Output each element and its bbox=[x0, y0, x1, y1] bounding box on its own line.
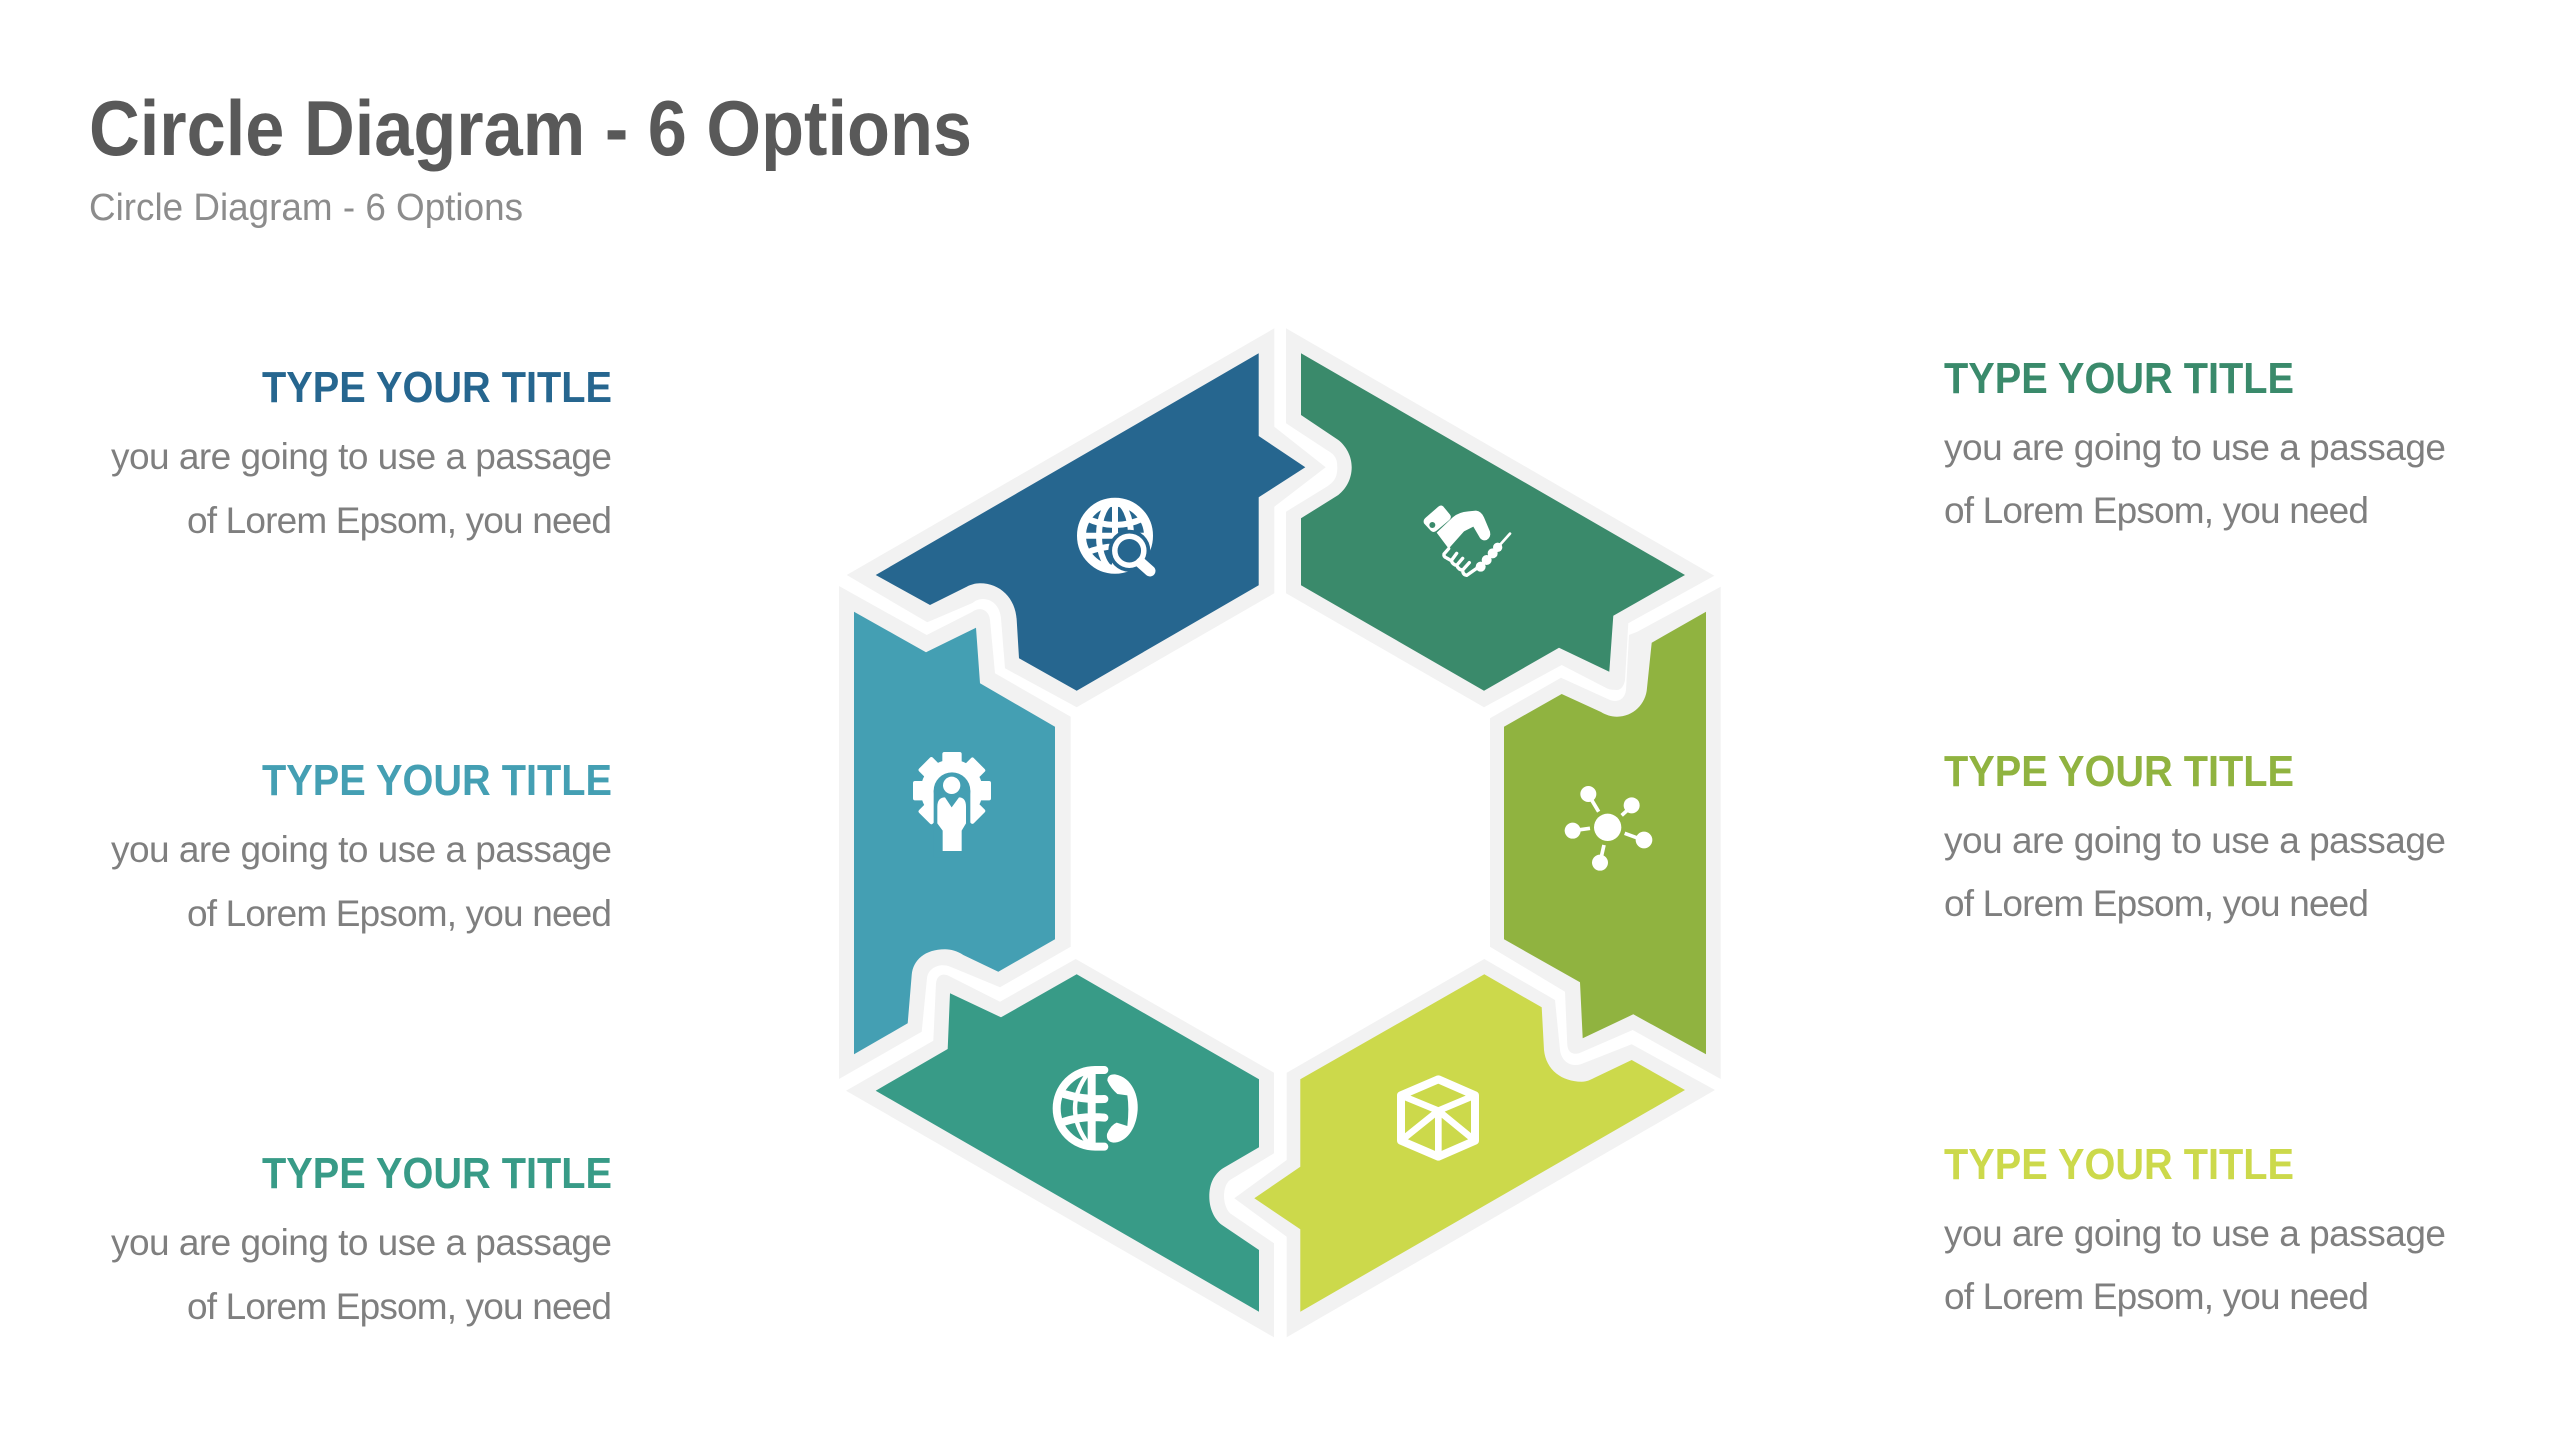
text block: top right: of Lorem Epsom, you need bbox=[1944, 490, 2369, 531]
text block: middle left: TYPE YOUR TITLE bbox=[262, 756, 612, 805]
text block: middle left bbox=[111, 756, 612, 934]
icon: globe with magnifier bbox=[1081, 502, 1150, 572]
panel: yellow hexagon segment bbox=[1234, 959, 1715, 1337]
text block: bottom left: of Lorem Epsom, you need bbox=[187, 1286, 612, 1327]
text block: top left: of Lorem Epsom, you need bbox=[187, 500, 612, 541]
icon: cube bbox=[1401, 1079, 1475, 1157]
panel: blue hexagon segment bbox=[847, 328, 1326, 707]
text block: top left bbox=[111, 363, 612, 541]
panel: light green hexagon segment bbox=[1490, 587, 1721, 1079]
text block: bottom right: you are going to use a passage bbox=[1944, 1213, 2446, 1254]
text block: top right: you are going to use a passage bbox=[1944, 427, 2446, 468]
text block: middle right bbox=[1944, 747, 2446, 924]
text block: bottom right: TYPE YOUR TITLE bbox=[1944, 1140, 2294, 1189]
text block: top right bbox=[1944, 354, 2446, 531]
icon: person in gear bbox=[913, 752, 991, 857]
text block: middle left: you are going to use a passage bbox=[111, 829, 612, 870]
panel: green hexagon segment bbox=[1286, 328, 1714, 707]
text block: top left: you are going to use a passage bbox=[111, 436, 612, 477]
text block: middle right: you are going to use a passage bbox=[1944, 820, 2446, 861]
text block: bottom left bbox=[111, 1149, 612, 1327]
icon: network nodes bbox=[1565, 786, 1652, 871]
panel: teal hexagon segment bbox=[839, 586, 1071, 1079]
icon: handshake bbox=[1424, 505, 1510, 575]
panel: dark teal hexagon segment bbox=[846, 959, 1274, 1337]
title: Circle Diagram - 6 Options bbox=[89, 84, 972, 172]
text block: top left: TYPE YOUR TITLE bbox=[262, 363, 612, 412]
icon: globe with phone bbox=[1057, 1070, 1138, 1147]
text block: top right: TYPE YOUR TITLE bbox=[1944, 354, 2294, 403]
subtitle: Circle Diagram - 6 Options bbox=[89, 187, 523, 229]
text block: middle left: of Lorem Epsom, you need bbox=[187, 893, 612, 934]
text block: bottom right bbox=[1944, 1140, 2446, 1317]
text block: bottom right: of Lorem Epsom, you need bbox=[1944, 1276, 2369, 1317]
text block: bottom left: TYPE YOUR TITLE bbox=[262, 1149, 612, 1198]
text block: middle right: of Lorem Epsom, you need bbox=[1944, 883, 2369, 924]
text block: bottom left: you are going to use a passage bbox=[111, 1222, 612, 1263]
text block: middle right: TYPE YOUR TITLE bbox=[1944, 747, 2294, 796]
